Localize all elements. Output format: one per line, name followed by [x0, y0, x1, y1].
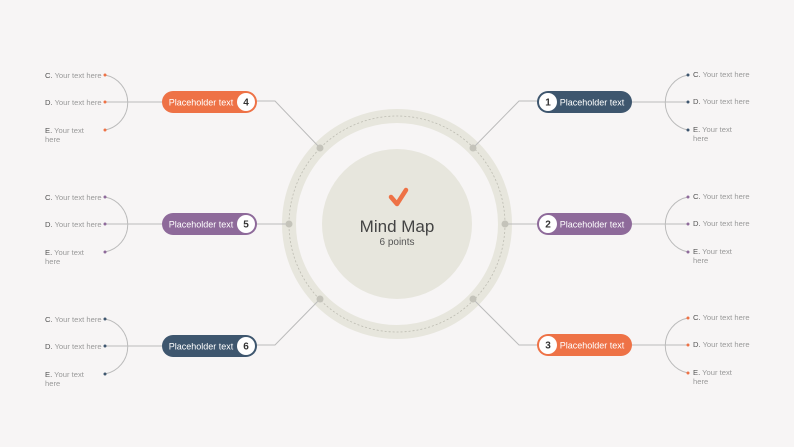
right labels: here: [693, 134, 708, 143]
right labels: D. Your text here: [693, 97, 750, 106]
pill 4: [162, 91, 257, 113]
right labels: E. Your text: [693, 368, 733, 377]
pill 2: 2: [545, 220, 551, 230]
pill 3: 3: [545, 340, 551, 352]
brackets: [105, 75, 688, 374]
pill 1: 1: [545, 98, 551, 108]
left labels: D. Your text here: [45, 342, 102, 351]
right labels: C. Your text here: [693, 192, 750, 201]
left labels: C. Your text here: [45, 71, 102, 80]
icon: check mark: [391, 190, 406, 204]
pill 1: [537, 91, 632, 113]
left labels: D. Your text here: [45, 98, 102, 107]
left labels: here: [45, 257, 60, 266]
left labels: C. Your text here: [45, 315, 102, 324]
right labels: C. Your text here: [693, 70, 750, 79]
right labels: D. Your text here: [693, 340, 750, 349]
center title: Mind Map: [360, 217, 434, 236]
left labels: E. Your text: [45, 370, 85, 379]
pill 5: Placeholder text: [169, 220, 234, 230]
center subtitle: 6 points: [379, 237, 415, 248]
right labels: E. Your text: [693, 125, 733, 134]
connectors: [257, 101, 537, 345]
pill 2: Placeholder text: [560, 220, 625, 230]
right labels: [686, 70, 750, 386]
right labels: C. Your text here: [693, 313, 750, 322]
pill 6: Placeholder text: [169, 342, 234, 352]
left labels: E. Your text: [45, 126, 85, 135]
pill 1: Placeholder text: [560, 98, 625, 108]
left labels: D. Your text here: [45, 220, 102, 229]
pill 5: 5: [243, 220, 249, 230]
right labels: D. Your text here: [693, 219, 750, 228]
left labels: [45, 71, 106, 388]
left labels: C. Your text here: [45, 193, 102, 202]
pill 4: Placeholder text: [169, 98, 234, 108]
pill 4: 4: [243, 98, 249, 108]
right labels: here: [693, 377, 708, 386]
left labels: E. Your text: [45, 248, 85, 257]
pill 6: 6: [243, 342, 249, 352]
pill 3: Placeholder text: [560, 340, 625, 350]
left labels: here: [45, 379, 60, 388]
pill 5: [162, 213, 257, 235]
pill 6: [162, 335, 257, 357]
left labels: here: [45, 135, 60, 144]
right labels: E. Your text: [693, 247, 733, 256]
center hub: [289, 116, 505, 332]
right labels: here: [693, 256, 708, 265]
pill 3: [537, 334, 632, 356]
pill 2: [537, 213, 632, 235]
